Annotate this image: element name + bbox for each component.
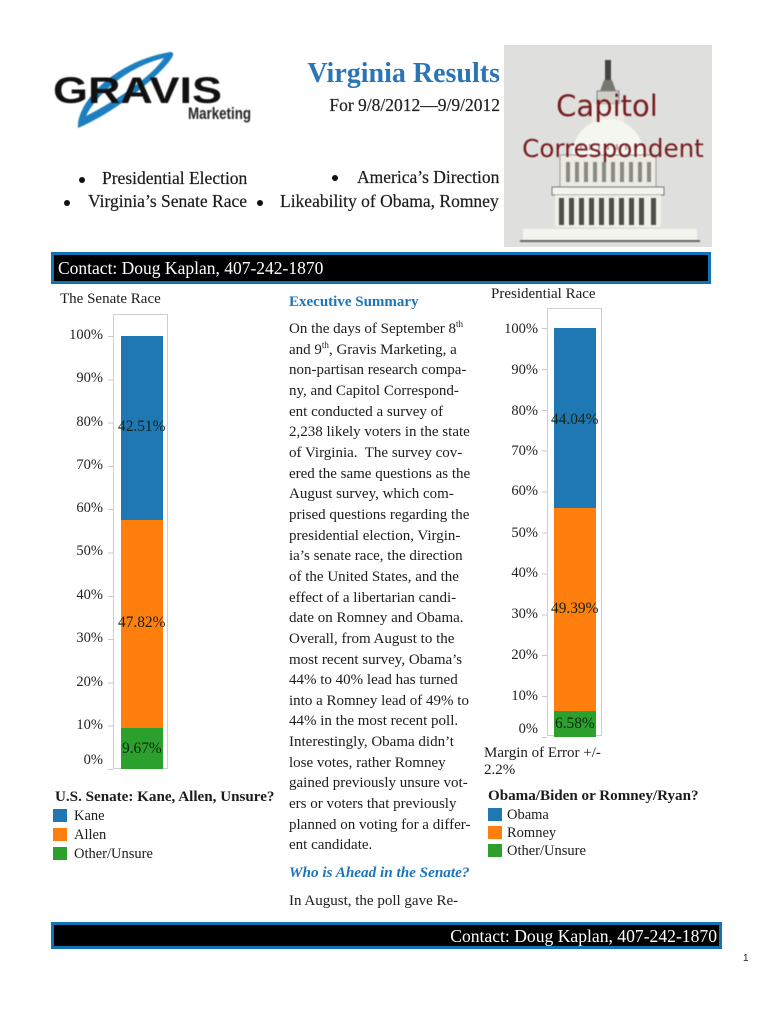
stacked bar chart: Senate: 30% — [76, 630, 103, 646]
stacked bar chart: Senate: 9.67% — [122, 740, 162, 757]
executive summary body text: lose votes, rather Romney — [289, 755, 446, 771]
legend: Senate — [53, 789, 274, 862]
executive summary body text: Overall, from August to the — [289, 631, 454, 647]
chart heading: The Senate Race: The Senate Race — [60, 291, 161, 307]
stacked bar chart: Senate: 70% — [76, 457, 103, 473]
image: Capitol Correspondent: Capitol — [556, 89, 658, 123]
legend: Presidential: Obama/Biden or Romney/Ryan? — [488, 788, 699, 804]
contact bar: bottom — [51, 922, 722, 949]
stacked bar chart: Senate: 50% — [76, 543, 103, 559]
stacked bar chart: Presidential: 20% — [511, 647, 538, 663]
stacked bar chart: Presidential: 50% — [511, 525, 538, 541]
image: Capitol Correspondent — [504, 45, 712, 247]
stacked bar chart: Presidential: 60% — [511, 483, 538, 499]
stacked bar chart: Senate: 20% — [76, 674, 103, 690]
chart heading: Presidential Race: Presidential Race — [491, 286, 596, 302]
stacked bar chart: Presidential: 49.39% — [551, 600, 598, 617]
executive summary body text: non-partisan research compa- — [289, 362, 466, 378]
legend: Presidential — [488, 788, 699, 859]
body text continuation: In August, the poll gave Re- — [289, 893, 458, 909]
legend: Senate: Other/Unsure — [74, 846, 153, 862]
executive summary body text: ent conducted a survey of — [289, 404, 443, 420]
executive summary body text: Interestingly, Obama didn’t — [289, 734, 454, 750]
stacked bar chart: Senate — [69, 314, 168, 770]
margin of error note — [484, 745, 601, 778]
executive summary body text: August survey, which com- — [289, 486, 454, 502]
executive summary body text: most recent survey, Obama’s — [289, 652, 462, 668]
executive summary body text: effect of a libertarian candi- — [289, 590, 456, 606]
executive summary body text: ered the same questions as the — [289, 466, 470, 482]
stacked bar chart: Senate: 40% — [76, 587, 103, 603]
stacked bar chart: Senate: 47.82% — [118, 614, 165, 631]
executive summary body text: gained previously unsure vot- — [289, 775, 468, 791]
topic bullets: Presidential Election — [102, 168, 247, 188]
executive summary body text: ers or voters that previously — [289, 796, 456, 812]
stacked bar chart: Senate: 80% — [76, 414, 103, 430]
date subtitle: For 9/8/2012—9/9/2012 — [329, 95, 500, 115]
stacked bar chart: Presidential: 90% — [511, 362, 538, 378]
executive summary body text: prised questions regarding the — [289, 507, 469, 523]
executive summary body text: presidential election, Virgin- — [289, 528, 460, 544]
margin of error note: Margin of Error +/- — [484, 745, 601, 761]
stacked bar chart: Senate: 100% — [69, 327, 103, 343]
legend: Presidential: Other/Unsure — [507, 843, 586, 859]
executive summary body text: 44% in the most recent poll. — [289, 713, 458, 729]
executive summary body text: ia’s senate race, the direction — [289, 548, 463, 564]
contact bar: bottom: Contact: Doug Kaplan, 407-242-1870 — [450, 926, 717, 946]
stacked bar chart: Presidential: 30% — [511, 606, 538, 622]
executive summary body text: planned on voting for a differ- — [289, 817, 470, 833]
stacked bar chart: Presidential — [504, 308, 602, 738]
executive summary body text: of Virginia. The survey cov- — [289, 445, 462, 461]
legend: Presidential: Obama — [507, 807, 549, 823]
executive summary body text: 2,238 likely voters in the state — [289, 424, 470, 440]
legend: Senate: U.S. Senate: Kane, Allen, Unsure? — [55, 789, 274, 805]
title: Virginia Results — [307, 58, 500, 89]
stacked bar chart: Senate: 42.51% — [118, 418, 165, 435]
logo: Gravis Marketing: GRAVIS — [53, 70, 222, 111]
stacked bar chart: Senate: 10% — [76, 717, 103, 733]
stacked bar chart: Presidential: 6.58% — [555, 715, 595, 732]
executive summary heading: Executive Summary — [289, 294, 419, 310]
margin of error note: 2.2% — [484, 762, 515, 778]
image: Capitol Correspondent: Correspondent — [522, 134, 704, 163]
legend: Senate: Kane — [74, 808, 105, 824]
executive summary body text: On the days of September 8th — [289, 319, 463, 337]
executive summary body text: and 9th, Gravis Marketing, a — [289, 340, 457, 358]
topic bullets: America’s Direction — [357, 167, 499, 187]
stacked bar chart: Senate: 0% — [84, 752, 103, 768]
stacked bar chart: Presidential: 0% — [519, 721, 538, 737]
stacked bar chart: Presidential: 100% — [504, 321, 538, 337]
stacked bar chart: Presidential: 70% — [511, 443, 538, 459]
topic bullets: Virginia’s Senate Race — [88, 191, 247, 211]
topic bullets — [64, 167, 500, 212]
contact bar: top: Contact: Doug Kaplan, 407-242-1870 — [58, 258, 323, 278]
stacked bar chart: Presidential: 10% — [511, 688, 538, 704]
executive summary body text: ny, and Capitol Correspond- — [289, 383, 459, 399]
logo: Gravis Marketing — [53, 51, 251, 128]
executive summary body text: of the United States, and the — [289, 569, 459, 585]
executive summary body text: ent candidate. — [289, 837, 372, 853]
page number: 1 — [743, 953, 749, 964]
executive summary body text — [289, 319, 470, 853]
stacked bar chart: Senate: 90% — [76, 370, 103, 386]
executive summary body text: date on Romney and Obama. — [289, 610, 464, 626]
executive summary body text: into a Romney lead of 49% to — [289, 693, 469, 709]
contact bar: top — [51, 252, 711, 284]
topic bullets: Likeability of Obama, Romney — [280, 191, 499, 211]
subheading: Who is Ahead in the Senate?: Who is Ahead in the Senate? — [289, 864, 469, 881]
stacked bar chart: Senate: 60% — [76, 500, 103, 516]
legend: Senate: Allen — [74, 827, 106, 843]
executive summary body text: 44% to 40% lead has turned — [289, 672, 458, 688]
stacked bar chart: Presidential: 44.04% — [551, 411, 598, 428]
stacked bar chart: Presidential: 80% — [511, 403, 538, 419]
legend: Presidential: Romney — [507, 825, 556, 841]
stacked bar chart: Presidential: 40% — [511, 565, 538, 581]
